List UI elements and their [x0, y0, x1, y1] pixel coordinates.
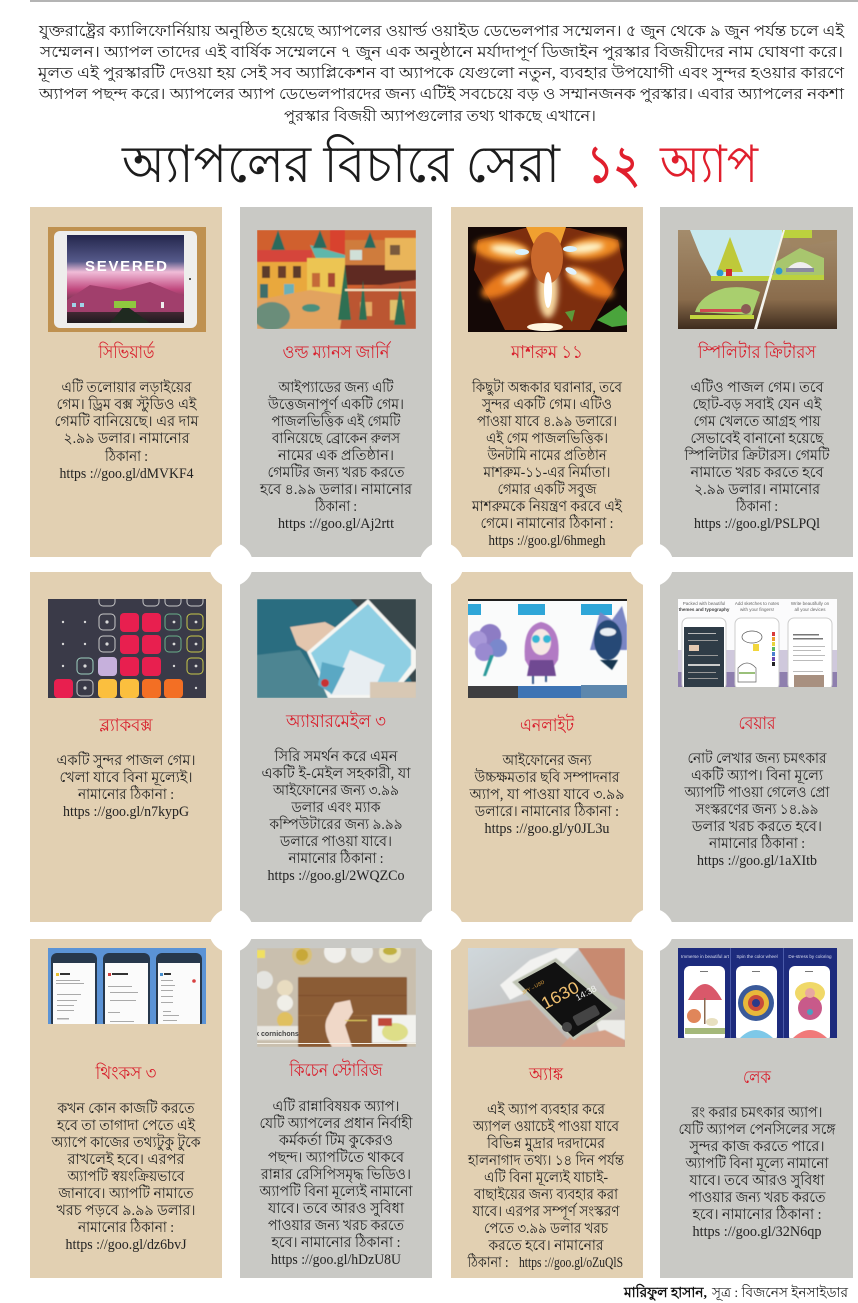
text: mushroom 11 description: কিছুটা অন্ধকার ঘরানার, তবে [471, 378, 623, 396]
text: lake description: সুন্দর কাজ করতে পারে। [689, 1139, 824, 1155]
title: ১২ [587, 137, 640, 194]
image: severed on tablet: SEVERED [85, 258, 167, 275]
text: mushroom 11 description: পাওয়া যাবে ৪.৯৯ ডলারে। [477, 414, 617, 430]
text: bear description: একটি অ্যাপ। বিনা মূল্যে [691, 766, 824, 785]
image: bear app screenshots [678, 599, 837, 687]
heading: severed: সিভিয়ার্ড [98, 341, 155, 362]
text: old man's journey description [259, 378, 413, 532]
image: enlight watercolor portraits [468, 599, 627, 698]
credit line [623, 1283, 848, 1302]
text: bear description: অ্যাপটি পাওয়া গেলেও প্রো [684, 783, 830, 801]
heading: airmail 3: অ্যায়ারমেইল ৩ [285, 711, 386, 731]
image: apple watch on wrist [468, 948, 625, 1047]
text: bear description: নোট লেখার জন্য চমৎকার [688, 749, 827, 767]
text: things description: জানাবে। অ্যাপটি নামাতে [58, 1184, 195, 1202]
text: lake description: https ://goo.gl/32N6qp [692, 1224, 822, 1240]
intro paragraph: যুক্তরাষ্ট্রের ক্যালিফোর্নিয়ায় অনুষ্ঠিত হয়েছে অ্যাপলের ওয়ার্ল্ড ওয়াইড ডেভেলপার সম্মেলন। ৫ জুন থেকে ৯ জুন পর্যন্ত চলে এই [38, 21, 845, 41]
image: blackbox puzzle grid [48, 599, 206, 698]
panel: things card [30, 939, 222, 1278]
image: lake coloring app screenshots: Spin the color wheel [736, 954, 778, 959]
text: splitter critters description: সেভাবেই বানানো হয়েছে [690, 429, 825, 447]
text: splitter critters description: ছোট-বড় সবাই যেন এই [692, 395, 823, 413]
image: airmail tablet on lap [257, 599, 416, 698]
text: airmail description [262, 747, 411, 884]
text: old man's journey description: হবে ৪.৯৯ ডলার। নামানোর [259, 482, 413, 498]
text: things description [51, 1099, 201, 1253]
text: kitchen stories description: অ্যাপটি বিনা মূল্যেই নামানো [259, 1182, 413, 1201]
panel: ace card [451, 939, 643, 1278]
text: severed description: ঠিকানা : [104, 447, 148, 465]
text: enlight description: অ্যাপ, যা পাওয়া যাবে ৩.৯৯ [469, 787, 624, 803]
heading: mushroom 11: মাশরুম ১১ [510, 342, 583, 362]
text: lake description: পাওয়ার জন্য খরচ করতে [688, 1190, 827, 1206]
text: old man's journey description: https ://goo.gl/Aj2rtt [278, 516, 394, 532]
image: bear app screenshots: themes and typography [679, 607, 730, 612]
image: apple watch on wrist: JPY→USD [521, 979, 546, 996]
text: bear description: https ://goo.gl/1aXItb [697, 853, 817, 869]
text: lake description: হবে। নামানোর ঠিকানা : [692, 1205, 822, 1223]
text: bear description: সংস্করণের জন্য ১৪.৯৯ [695, 802, 818, 818]
image: kitchen stories cutting board: x cornichons [255, 1031, 299, 1038]
text: ace description: এটি বিনা মূল্যেই যাচাই- [484, 1168, 608, 1187]
image: bear app screenshots: with your fingers! [740, 607, 774, 612]
text: kitchen stories description: যাবে। তবে আরও সুবিধা [267, 1199, 405, 1217]
heading: old man's journey: ওল্ড ম্যানস জার্নি [282, 341, 391, 362]
text: kitchen stories description: এটি রান্নাবিষয়ক অ্যাপ। [272, 1097, 400, 1115]
text: splitter critters description: এটিও পাজল গেম। তবে [690, 378, 824, 396]
text: bear description [684, 749, 830, 869]
text: old man's journey description: ঠিকানা : [314, 497, 357, 515]
image: bear app screenshots: Write beautifully on [791, 601, 830, 606]
text: blackbox description: নামানোর ঠিকানা : [77, 785, 174, 803]
text: things description: অ্যাপে কাজের তথ্যটুকু টুকে [51, 1133, 201, 1151]
text: kitchen stories description: যেটি অ্যাপলের প্রধান নির্বাহী [260, 1114, 413, 1132]
text: ace description: করতে হবে। নামানোর [488, 1238, 604, 1254]
intro paragraph [37, 21, 845, 125]
text: airmail description: আইফোনের জন্য ৩.৯৯ [272, 781, 399, 799]
intro paragraph: পুরস্কার বিজয়ী অ্যাপগুলোর তথ্য থাকছে এখানে। [284, 106, 596, 125]
intro paragraph: অ্যাপল পছন্দ করে। অ্যাপলের অ্যাপ ডেভেলপারদের জন্য এটিই সবচেয়ে বড় ও সম্মানজনক পুরস্কার। এবার অ্যাপলের নকশা [38, 84, 845, 103]
heading: ace: অ্যাঙ্ক [528, 1064, 564, 1084]
title: অ্যাপ [659, 137, 759, 194]
text: lake description: রং করার চমৎকার অ্যাপ। [691, 1105, 822, 1121]
image: lake coloring app screenshots [678, 948, 837, 1038]
text: kitchen stories description: হবে। নামানোর ঠিকানা : [271, 1233, 400, 1251]
image: bear app screenshots: Add sketches to notes [735, 601, 780, 606]
text: ace description: বিভিন্ন মুদ্রার দরদামের [486, 1134, 606, 1152]
heading: kitchen stories: কিচেন স্টোরিজ [289, 1059, 383, 1080]
panel: severed card [30, 207, 222, 557]
text: mushroom 11 description: উনটামি নামের প্রতিষ্ঠান [487, 446, 608, 464]
text: splitter critters description: স্পিলিটার ক্রিটারস। গেমটি [684, 446, 831, 464]
text: ace description: এই অ্যাপ ব্যবহার করে [487, 1100, 606, 1118]
panel: kitchen stories card [240, 939, 432, 1278]
text: ace description [467, 1100, 625, 1271]
panel: lake card [660, 939, 853, 1278]
text: lake description [678, 1105, 837, 1240]
text: ace description: বাছাইয়ের জন্য ব্যবহার করা [473, 1185, 619, 1203]
top rule [30, 0, 858, 2]
text: old man's journey description: বানিয়েছে ব্রোকেন রুলস [271, 429, 401, 447]
text: ace description: হালনাগাদ তথ্য। ১৪ দিন পর্যন্ত [467, 1151, 625, 1169]
panel: mushroom 11 card [451, 207, 643, 557]
image: lake coloring app screenshots: De-stress by coloring [788, 954, 832, 959]
title: অ্যাপলের বিচারে সেরা [121, 134, 561, 194]
title [121, 134, 759, 194]
text: lake description: অ্যাপটি বিনা মূল্যে নামানো [685, 1154, 829, 1173]
text: mushroom 11 description: এই গেম পাজলভিত্তিক। [486, 429, 608, 447]
text: airmail description: নামানোর ঠিকানা : [288, 849, 384, 867]
text: kitchen stories description: পাওয়ার জন্য খরচ করতে [268, 1218, 405, 1234]
text: lake description: যাবে। তবে আরও সুবিধা [689, 1171, 825, 1189]
text: kitchen stories description [259, 1097, 413, 1268]
text: airmail description: ডলারে পাওয়া যাবে। [279, 834, 392, 850]
text: airmail description: সিরি সমর্থন করে এমন [274, 747, 399, 765]
text: splitter critters description: ২.৯৯ ডলার। নামানোর [694, 482, 821, 498]
text: severed description: ২.৯৯ ডলার। নামানোর [64, 431, 190, 447]
text: mushroom 11 description: মাশরুম-১১-এর নির্মাতা। [483, 463, 610, 481]
heading: lake: লেক [743, 1067, 771, 1087]
text: mushroom 11 description: গেমার একটি সবুজ [498, 480, 597, 498]
text: bear description: ডলার খরচ করতে হবে। [691, 819, 822, 835]
text: severed description [54, 378, 199, 482]
heading: splitter critters: স্পিলিটার ক্রিটারস [697, 341, 817, 362]
image: old man's journey village [257, 230, 416, 329]
text: blackbox description: খেলা যাবে বিনা মূল্যেই। [60, 768, 192, 787]
text: airmail description: https ://goo.gl/2WQZCo [268, 868, 404, 884]
panel: old man's journey card [240, 207, 432, 557]
text: airmail description: একটি ই-মেইল সহকারী, যা [262, 764, 411, 782]
heading: things 3: থিংকস ৩ [95, 1063, 156, 1083]
text: ace description: অ্যাপল ওয়াচেই পাওয়া যাবে [472, 1117, 620, 1135]
image: apple watch on wrist: 14:38 [574, 983, 598, 1003]
image: things app screenshots [48, 948, 206, 1024]
text: old man's journey description: গেমটির জন্য খরচ করতে [268, 463, 406, 481]
text: ace description: পেতে ৩.৯৯ ডলার খরচ [484, 1221, 609, 1237]
panel: airmail card [240, 572, 432, 922]
text: kitchen stories description: কর্মকর্তা টিম কুকেরও [278, 1131, 393, 1149]
text: mushroom 11 description: সুন্দর একটি গেম। এটিও [481, 395, 612, 413]
text: mushroom 11 description [471, 378, 623, 549]
text: kitchen stories description: রান্নার রেসিপিসমৃদ্ধ ভিডিও। [260, 1165, 411, 1184]
text: enlight description: উচ্চক্ষমতার ছবি সম্পাদনার [474, 768, 620, 786]
text: enlight description: ডলারে। নামানোর ঠিকানা : [474, 802, 619, 820]
heading: bear: বেয়ার [738, 713, 776, 733]
text: things description: হবে তা তাগাদা পেতে এই [56, 1116, 196, 1134]
image: severed on tablet [48, 227, 206, 332]
panel: enlight card [451, 572, 643, 922]
text: ace description: https ://goo.gl/oZuQlS [519, 1255, 623, 1271]
text: kitchen stories description: পছন্দ। অ্যাপটিতে থাকবে [268, 1148, 405, 1166]
text: airmail description: ডলার এবং ম্যাক [291, 800, 381, 816]
text: severed description: গেমটি বানিয়েছে। এর দাম [54, 412, 199, 430]
text: old man's journey description: আইপ্যাডের জন্য এটি [278, 378, 395, 396]
text: splitter critters description: গেম খেলতে আগ্রহ পায় [694, 414, 822, 430]
credit line: সূত্র : বিজনেস ইনসাইডার [711, 1284, 848, 1301]
text: blackbox description [56, 751, 196, 820]
text: enlight description: https ://goo.gl/y0JL3u [484, 821, 610, 837]
text: kitchen stories description: https ://goo.gl/hDzU8U [271, 1252, 401, 1268]
text: airmail description: কম্পিউটারের জন্য ৯.৯৯ [269, 815, 402, 833]
text: splitter critters description [684, 378, 831, 532]
text: enlight description: আইফোনের জন্য [502, 751, 592, 769]
image: bear app screenshots: all your devices [794, 607, 826, 612]
text: enlight description [469, 751, 624, 837]
text: splitter critters description: https ://goo.gl/PSLPQl [694, 516, 820, 532]
text: mushroom 11 description: https ://goo.gl/6hmegh [488, 533, 606, 549]
text: old man's journey description: উত্তেজনাপূর্ণ একটি গেম। [267, 395, 404, 414]
text: old man's journey description: নামের এক প্রতিষ্ঠান। [277, 446, 394, 464]
text: ace description: যাবে। এরপর সম্পূর্ণ সংস্করণ [472, 1202, 621, 1221]
text: splitter critters description: নামাতে খরচ করতে হবে [690, 465, 824, 481]
text: things description: https ://goo.gl/dz6bvJ [66, 1237, 187, 1253]
text: things description: অ্যাপটি স্বয়ংক্রিয়ভাবে [67, 1167, 185, 1185]
text: things description: রাখলেই হবে। এরপর [66, 1150, 186, 1168]
image: splitter critters [678, 230, 837, 329]
text: things description: খরচ পড়বে ৯.৯৯ ডলার। [56, 1203, 196, 1219]
text: old man's journey description: পাজলভিত্তিক এই গেমটি [272, 412, 402, 430]
panel: bear card [660, 572, 853, 922]
text: severed description: গেম। ড্রিম বক্স স্টুডিও এই [56, 395, 198, 413]
text: lake description: যেটি অ্যাপল পেনসিলের সঙ্গে [678, 1120, 837, 1138]
text: blackbox description: https ://goo.gl/n7kypG [63, 804, 189, 820]
image: mushroom 11 [468, 227, 627, 332]
image: bear app screenshots: Packed with beautiful [683, 601, 725, 606]
heading: enlight: এনলাইট [520, 714, 575, 735]
text: mushroom 11 description: মাশরুমকে নিয়ন্ত্রণ করবে এই [471, 497, 623, 515]
intro paragraph: সম্মেলন। অ্যাপল তাদের এই বার্ষিক সম্মেলনে ৭ জুন এক অনুষ্ঠানে মর্যাদাপূর্ণ ডিজাইন পুরস্কার বিজয়ীদের নাম ঘোষণা করে। [39, 42, 843, 62]
heading: blackbox: ব্ল্যাকবক্স [99, 715, 153, 735]
text: mushroom 11 description: গেমে। নামানোর ঠিকানা : [480, 514, 614, 532]
image: apple watch on wrist: 1630 [538, 978, 582, 1013]
text: severed description: এটি তলোয়ার লড়াইয়ের [62, 378, 192, 396]
text: things description: নামানোর ঠিকানা : [77, 1218, 174, 1236]
text: ace description: ঠিকানা : [467, 1253, 508, 1271]
text: severed description: https ://goo.gl/dMVKF4 [60, 466, 194, 482]
credit line: মারিফুল হাসান, [623, 1283, 707, 1302]
text: things description: কখন কোন কাজটি করতে [57, 1099, 196, 1117]
text: blackbox description: একটি সুন্দর পাজল গেম। [56, 751, 196, 769]
image: kitchen stories cutting board [255, 948, 416, 1047]
text: splitter critters description: ঠিকানা : [735, 497, 778, 515]
panel: blackbox card [30, 572, 222, 922]
text: bear description: নামানোর ঠিকানা : [708, 834, 805, 852]
panel: splitter critters card [660, 207, 853, 557]
image: lake coloring app screenshots: Immerse in beautiful art [681, 954, 730, 959]
intro paragraph: মূলত এই পুরস্কারটি দেওয়া হয় সেই সব অ্যাপ্লিকেশন বা অ্যাপকে যেগুলো নতুন, ব্যবহার উপযোগী এবং সুন্দর হওয়ার কারণে [37, 63, 845, 83]
